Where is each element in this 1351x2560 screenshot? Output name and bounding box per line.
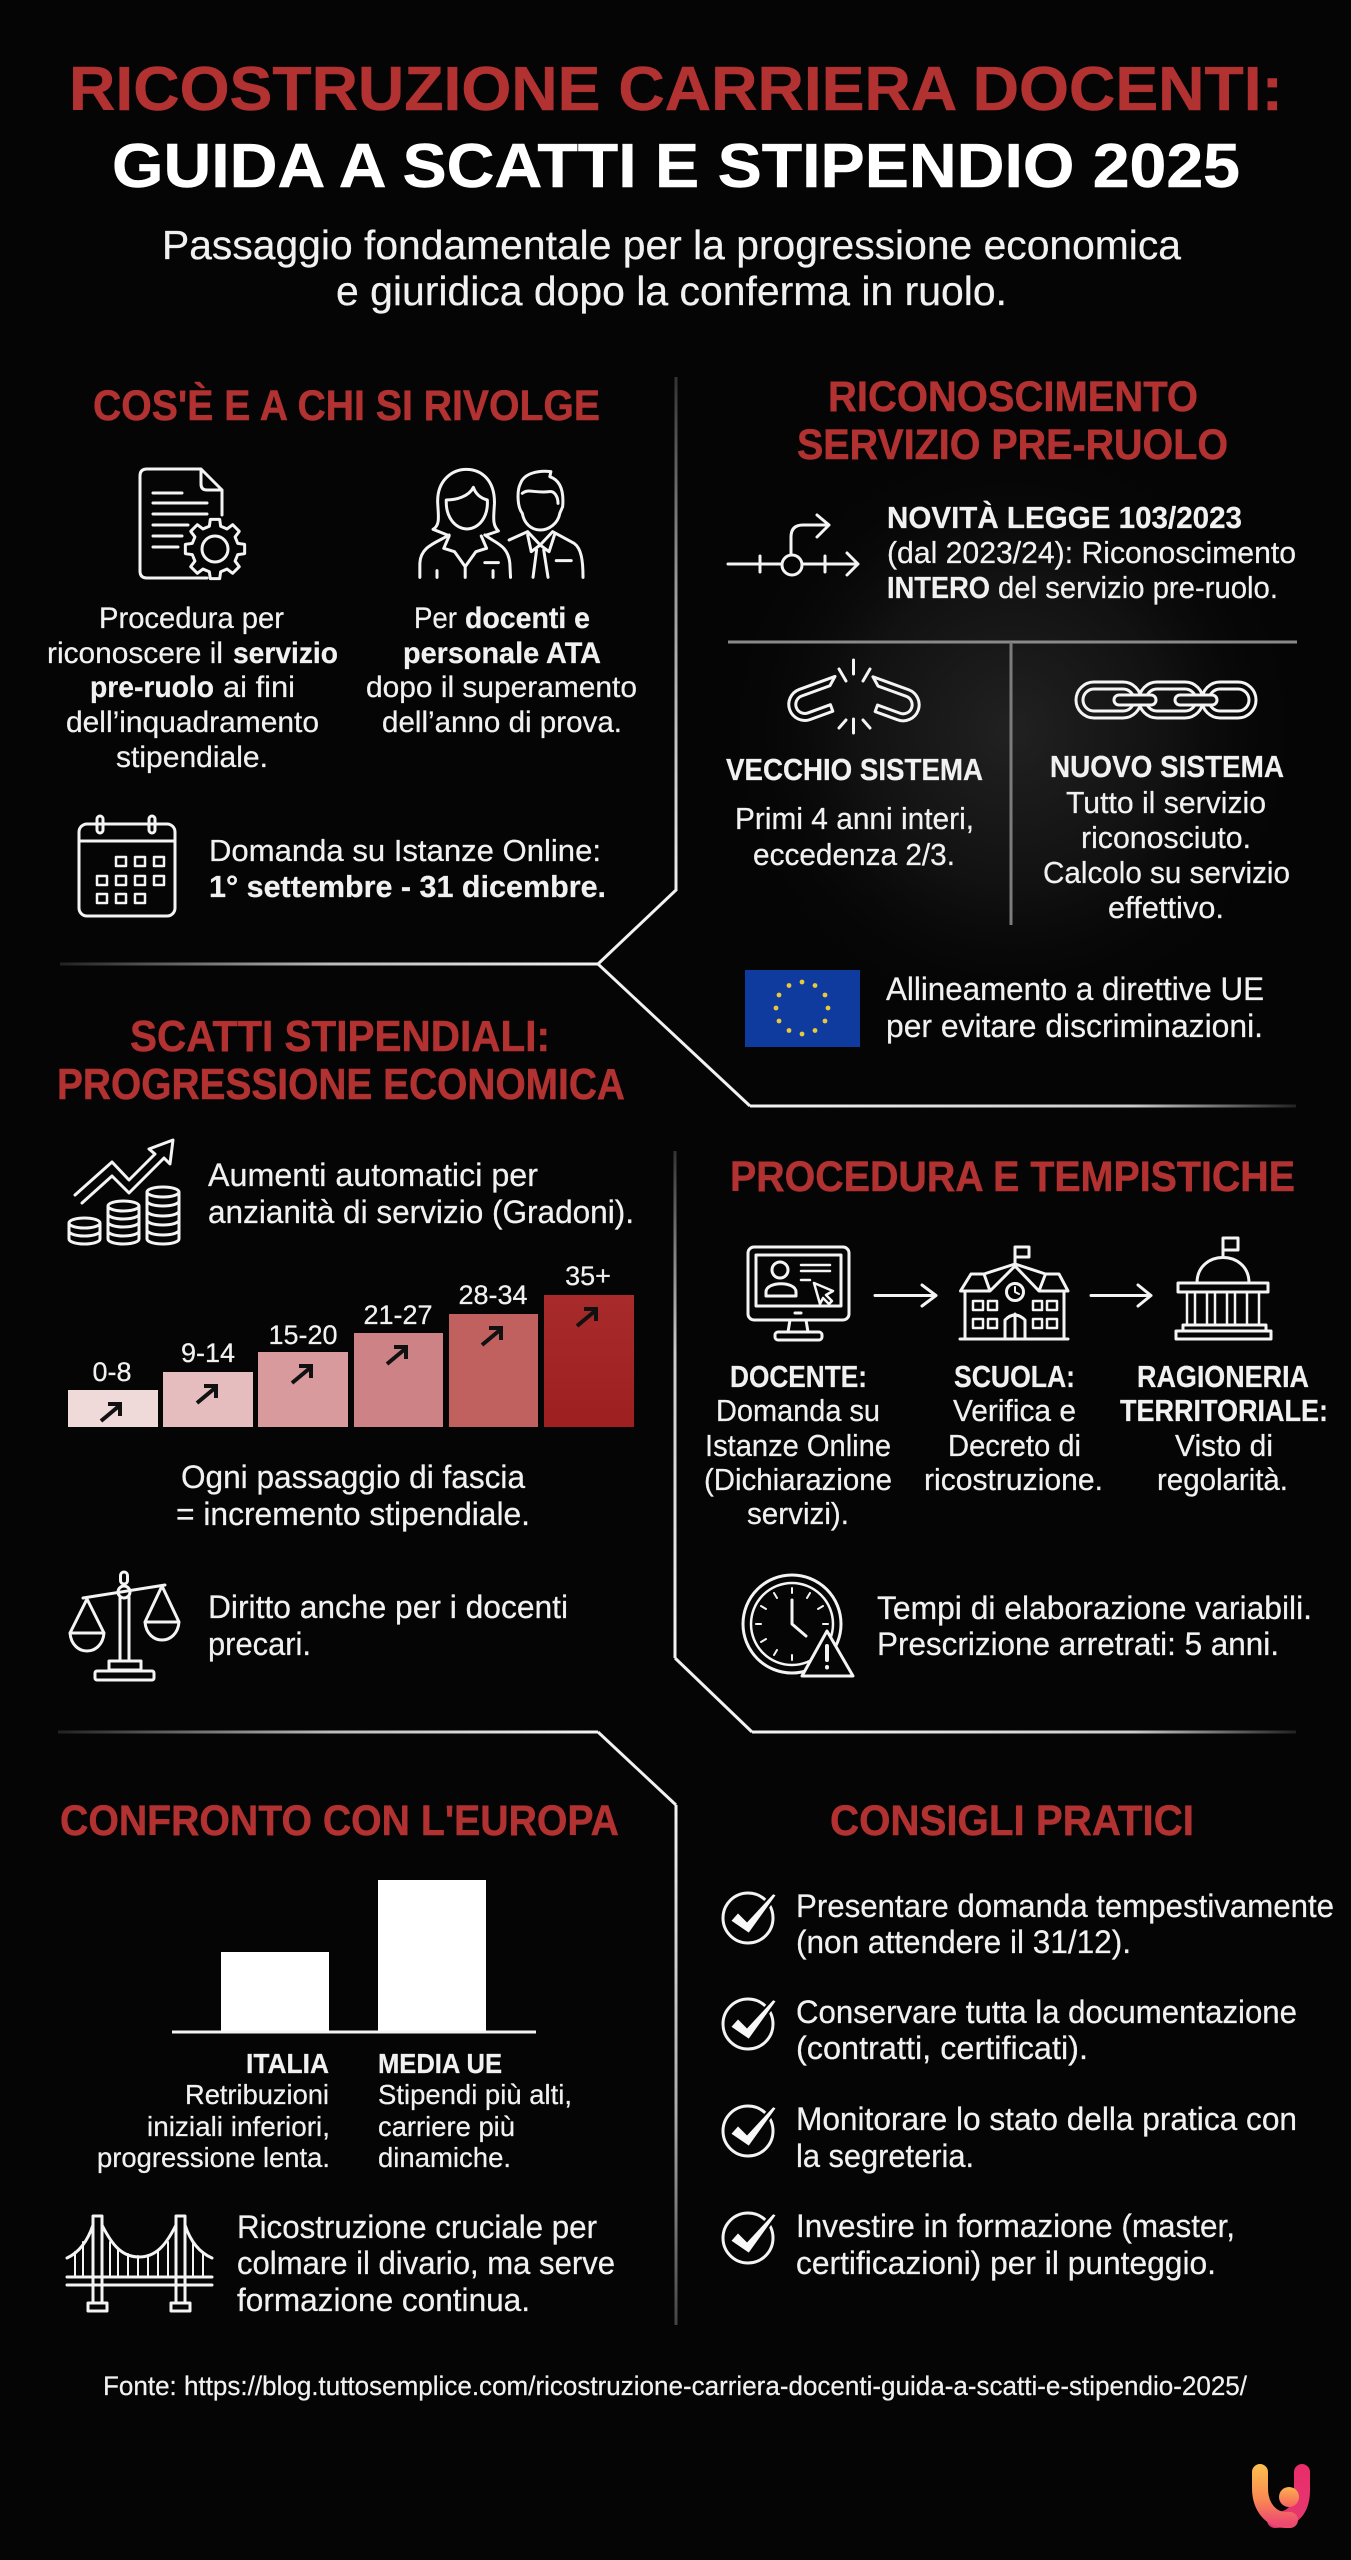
text: italia: iniziali inferiori,	[147, 2111, 330, 2142]
bar: 35+	[544, 1261, 634, 1427]
text: destinatari: personale ATA	[403, 637, 601, 670]
tip 3	[723, 2101, 1297, 2174]
text: docente: servizi).	[747, 1496, 849, 1531]
text: direttive UE: per evitare discriminazioni.	[886, 1008, 1263, 1044]
icon: teacher and staff	[420, 469, 583, 577]
text: vecchio sistema: VECCHIO SISTEMA	[726, 752, 983, 787]
icon: check	[723, 2213, 777, 2263]
text: domanda	[209, 833, 606, 904]
text: docente	[704, 1359, 892, 1531]
heading: riconoscimento: SERVIZIO PRE-RUOLO	[797, 421, 1228, 469]
text: direttive UE	[886, 971, 1264, 1044]
text: aumenti automatici: anzianità di servizio (Gradoni).	[208, 1194, 634, 1230]
text: procedura: riconoscere il	[47, 637, 223, 670]
text: scuola	[924, 1359, 1103, 1497]
tip 4: certificazioni) per il punteggio.	[796, 2245, 1216, 2281]
icon: check	[723, 1893, 777, 1943]
heading: procedura: PROCEDURA E TEMPISTICHE	[730, 1153, 1295, 1201]
tip 4: Investire in formazione (master,	[796, 2208, 1235, 2244]
icon: clock with warning	[743, 1575, 853, 1676]
tip 4	[723, 2208, 1235, 2281]
icon: broken chain	[784, 660, 924, 733]
text: ragioneria	[1120, 1359, 1328, 1497]
text: tempi	[877, 1590, 1312, 1662]
arrow: scuola to ragioneria	[1091, 1285, 1151, 1306]
text: procedura: ai fini	[223, 671, 295, 704]
icon: intact chain	[1076, 682, 1256, 718]
text: direttive UE: Allineamento a direttive UE	[886, 971, 1264, 1007]
text: scuola: SCUOLA:	[954, 1359, 1075, 1394]
bar: 0-8	[68, 1357, 158, 1427]
icon: government building	[1176, 1238, 1271, 1339]
bar: 28-34: 28-34	[458, 1280, 528, 1310]
bar: 35+: 35+	[565, 1261, 611, 1291]
text: vecchio sistema	[726, 752, 983, 872]
bar: 0-8: 0-8	[92, 1357, 132, 1387]
text: ragioneria: RAGIONERIA	[1137, 1359, 1309, 1394]
text: tempi: Prescrizione arretrati: 5 anni.	[877, 1626, 1279, 1662]
panel: riconoscimento servizio pre-ruolo	[726, 373, 1297, 1047]
heading: consigli: CONSIGLI PRATICI	[830, 1797, 1194, 1845]
text: novità legge: (dal 2023/24): Riconoscimento	[887, 535, 1296, 570]
title	[69, 55, 1283, 201]
text: nuovo sistema	[1043, 749, 1290, 925]
text: media UE: MEDIA UE	[378, 2048, 502, 2079]
subtitle: e giuridica dopo la conferma in ruolo.	[336, 268, 1007, 314]
text: procedura: Procedura per	[99, 602, 284, 635]
text: vecchio sistema: Primi 4 anni interi,	[735, 801, 974, 836]
text: media UE: carriere più	[378, 2111, 515, 2142]
heading: scatti: PROGRESSIONE ECONOMICA	[57, 1060, 625, 1109]
text: scuola: Decreto di	[948, 1428, 1081, 1463]
icon: scales	[70, 1572, 179, 1680]
title: GUIDA A SCATTI E STIPENDIO 2025	[112, 132, 1240, 201]
text: vecchio sistema: eccedenza 2/3.	[753, 837, 955, 872]
panel: confronto con l'europa	[60, 1797, 619, 2318]
text: procedura: stipendiale.	[116, 741, 268, 774]
text: italia	[97, 2048, 330, 2173]
text: ricostruzione cruciale: colmare il divario, ma serve	[237, 2245, 615, 2281]
text: ogni passaggio	[176, 1459, 530, 1532]
subtitle	[162, 222, 1181, 314]
text: ricostruzione cruciale: Ricostruzione cruciale per	[237, 2209, 597, 2245]
icon: monitor with user	[748, 1247, 849, 1340]
text: docente: (Dichiarazione	[704, 1462, 892, 1497]
text: destinatari: docenti e	[465, 602, 590, 635]
text: destinatari: dell’anno di prova.	[382, 706, 622, 739]
heading: confronto: CONFRONTO CON L'EUROPA	[60, 1797, 619, 1845]
text: procedura: pre-ruolo	[90, 671, 214, 704]
text: ogni passaggio: = incremento stipendiale.	[176, 1496, 530, 1532]
text: procedura: servizio	[233, 637, 338, 670]
text: domanda: Domanda su Istanze Online:	[209, 833, 601, 868]
icon: growth arrow and coins	[69, 1140, 179, 1244]
text: nuovo sistema: Calcolo su servizio	[1043, 855, 1290, 890]
panel: scatti stipendiali	[57, 1012, 634, 1680]
text: procedura	[47, 602, 338, 774]
text: diritto precari: Diritto anche per i docenti	[208, 1589, 568, 1625]
text: italia: ITALIA	[246, 2048, 329, 2079]
tip 3: Monitorare lo stato della pratica con	[796, 2101, 1297, 2137]
text: nuovo sistema: effettivo.	[1108, 890, 1224, 925]
text: novità legge	[887, 500, 1296, 605]
icon: check	[723, 1999, 777, 2049]
text: italia: progressione lenta.	[97, 2142, 330, 2173]
heading: scatti	[57, 1012, 625, 1109]
text: diritto precari	[208, 1589, 568, 1662]
text: ricostruzione cruciale	[237, 2209, 615, 2318]
text: italia: Retribuzioni	[185, 2079, 329, 2110]
section divider lines	[58, 377, 1296, 2325]
bar chart: italia vs media UE	[172, 1880, 536, 2032]
heading: riconoscimento: RICONOSCIMENTO	[828, 373, 1198, 421]
text: nuovo sistema: Tutto il servizio	[1066, 785, 1266, 820]
tip 1: Presentare domanda tempestivamente	[796, 1888, 1334, 1924]
icon: EU flag	[745, 970, 860, 1047]
source line: Fonte: https://blog.tuttosemplice.com/ricostruzione-carriera-docenti-guida-a-scatti-e-stipendio-2025/	[103, 2371, 1247, 2401]
icon: school	[960, 1247, 1068, 1339]
arrow: docente to scuola	[875, 1285, 936, 1306]
panel: procedura e tempistiche	[704, 1153, 1328, 1676]
text: ogni passaggio: Ogni passaggio di fascia	[181, 1459, 525, 1495]
text: diritto precari: precari.	[208, 1626, 311, 1662]
title: RICOSTRUZIONE CARRIERA DOCENTI:	[69, 55, 1283, 124]
text: scuola: Verifica e	[953, 1393, 1076, 1428]
logo	[1260, 2472, 1302, 2520]
bar: 9-14: 9-14	[181, 1338, 235, 1368]
heading: scatti: SCATTI STIPENDIALI:	[130, 1012, 550, 1061]
text: aumenti automatici: Aumenti automatici per	[208, 1157, 538, 1193]
tip 2	[723, 1994, 1297, 2066]
panel: cos'è e a chi si rivolge	[47, 382, 637, 916]
text: docente: DOCENTE:	[730, 1359, 867, 1394]
text: destinatari	[366, 602, 637, 739]
text: tempi: Tempi di elaborazione variabili.	[877, 1590, 1312, 1626]
bar: 15-20	[258, 1320, 348, 1427]
bar: 9-14	[163, 1338, 253, 1427]
bar: 21-27	[354, 1300, 443, 1427]
icon: check	[723, 2106, 777, 2156]
icon: branching path	[728, 515, 858, 575]
text: ricostruzione cruciale: formazione continua.	[237, 2282, 530, 2318]
text: ragioneria: regolarità.	[1157, 1462, 1288, 1497]
bar: 28-34	[449, 1280, 538, 1427]
text: procedura: dell’inquadramento	[66, 706, 319, 739]
subtitle: Passaggio fondamentale per la progressione economica	[162, 222, 1181, 268]
text: media UE	[378, 2048, 572, 2173]
text: media UE: Stipendi più alti,	[378, 2079, 572, 2110]
text: nuovo sistema: riconosciuto.	[1081, 820, 1251, 855]
tip 3: la segreteria.	[796, 2138, 974, 2174]
text: docente: Domanda su	[716, 1393, 880, 1428]
text: novità legge: INTERO	[887, 570, 990, 605]
text: docente: Istanze Online	[705, 1428, 891, 1463]
tip 2: Conservare tutta la documentazione	[796, 1994, 1297, 2030]
icon: document with gear	[140, 469, 245, 579]
text: destinatari: dopo il superamento	[366, 671, 637, 704]
text: nuovo sistema: NUOVO SISTEMA	[1050, 749, 1284, 784]
panel: consigli pratici	[723, 1797, 1334, 2281]
tip 1: (non attendere il 31/12).	[796, 1924, 1131, 1960]
text: novità legge: NOVITÀ LEGGE 103/2023	[887, 500, 1242, 535]
text: domanda: 1° settembre - 31 dicembre.	[209, 869, 606, 904]
bar: 21-27: 21-27	[363, 1300, 433, 1330]
tip 1	[723, 1888, 1334, 1960]
text: novità legge: del servizio pre-ruolo.	[998, 570, 1278, 605]
icon: bridge	[67, 2216, 212, 2311]
tip 2: (contratti, certificati).	[796, 2030, 1088, 2066]
text: aumenti automatici	[208, 1157, 634, 1230]
text: destinatari: Per	[414, 602, 457, 635]
icon: calendar	[79, 816, 175, 916]
text: scuola: ricostruzione.	[924, 1462, 1103, 1497]
bar chart: fasce di anzianità	[68, 1261, 634, 1427]
text: ragioneria: Visto di	[1175, 1428, 1273, 1463]
heading: cos'è: COS'È E A CHI SI RIVOLGE	[93, 382, 600, 430]
heading: riconoscimento	[797, 373, 1228, 469]
bar: 15-20: 15-20	[268, 1320, 338, 1350]
text: media UE: dinamiche.	[378, 2142, 511, 2173]
